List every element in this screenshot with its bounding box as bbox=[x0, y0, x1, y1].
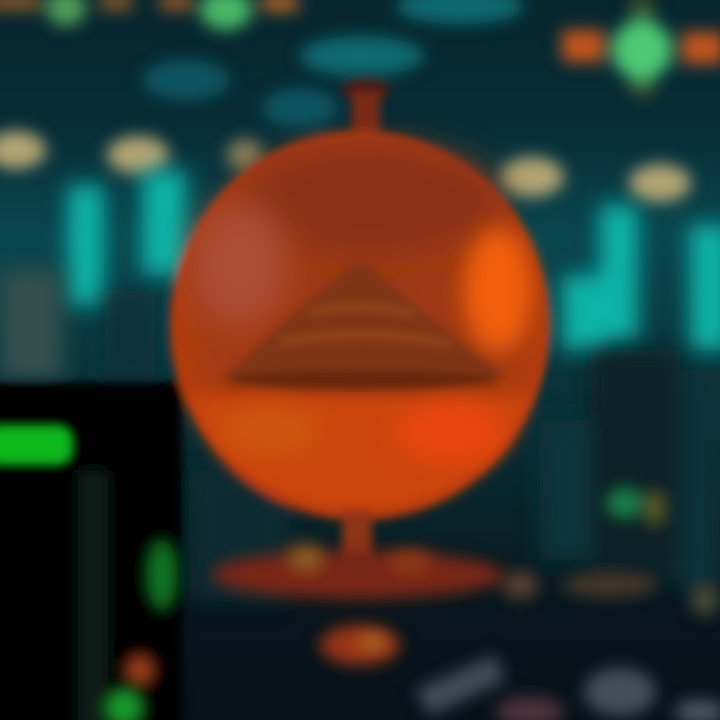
yellow lights bbox=[0, 131, 691, 202]
green bottom light bbox=[104, 688, 144, 720]
top-right satellite lantern bbox=[562, 0, 720, 96]
globe stem bottom bbox=[342, 510, 372, 558]
pyramid base shadow bbox=[227, 371, 497, 389]
orange small light bbox=[124, 653, 156, 687]
green small light bbox=[146, 539, 178, 611]
small orange lamp bbox=[320, 625, 400, 665]
green indicator bar bbox=[0, 426, 72, 464]
lower bright band bbox=[190, 395, 530, 515]
right bright highlight bbox=[464, 228, 532, 352]
lower left glow bbox=[220, 404, 320, 456]
upper dark shading bbox=[240, 145, 500, 255]
lower right glow bbox=[395, 402, 505, 462]
black foreground panel bbox=[0, 382, 182, 720]
teal clouds bbox=[142, 0, 524, 128]
brown pyramid bbox=[222, 262, 505, 390]
lamp core bbox=[358, 633, 386, 651]
left muted highlight bbox=[192, 203, 288, 327]
pyramid light layers bbox=[280, 307, 450, 344]
top-left lanterns bbox=[0, 0, 298, 30]
bottom-right vehicles bbox=[415, 655, 720, 720]
panel inner column bbox=[78, 470, 108, 720]
base yellow light bbox=[288, 544, 324, 572]
dark city skyline bbox=[0, 270, 720, 600]
globe base bbox=[212, 544, 504, 599]
city window lights bbox=[502, 488, 719, 616]
base orange light bbox=[388, 550, 432, 574]
orange sphere bbox=[170, 130, 550, 520]
globe stem top bbox=[342, 78, 390, 142]
cyan light towers bbox=[68, 170, 720, 350]
